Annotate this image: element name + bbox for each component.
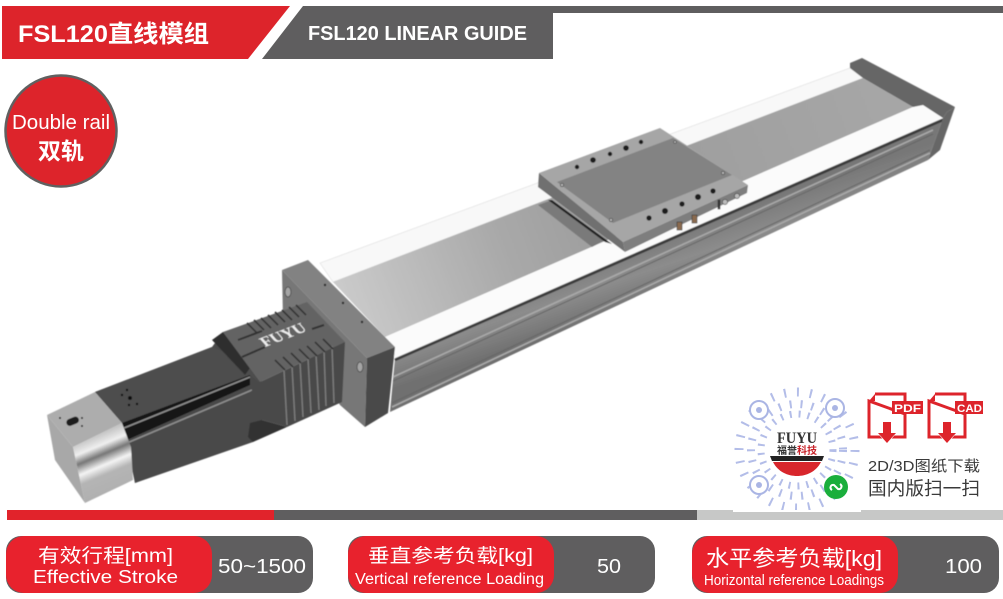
download icon: PDF (869, 394, 923, 443)
logo bowl (770, 456, 824, 476)
far end plate (850, 58, 955, 160)
QR code panel (733, 385, 861, 512)
motor body (95, 332, 262, 483)
rail side profile (390, 118, 943, 412)
download icon: CAD: CAD (957, 403, 982, 415)
carriage screws (560, 141, 725, 222)
stroke Chinese label: 有效行程[mm] (38, 545, 173, 567)
download caption: 2D/3D图纸下载 (868, 458, 980, 475)
carriage holes (575, 140, 716, 221)
spec: vertical load (348, 536, 655, 593)
vertical load value: 50 (597, 556, 621, 578)
carriage dark edge (548, 200, 612, 244)
QR radial dashes (739, 392, 855, 508)
linear module product illustration (47, 58, 955, 503)
carriage slide plate (538, 128, 748, 252)
spec: effective stroke (6, 536, 313, 593)
vertical load English label: Vertical reference Loading (355, 571, 544, 588)
FUYU logo on housing: FUYU (256, 320, 311, 350)
vertical load Chinese label: 垂直参考负载[kg] (368, 545, 533, 567)
English heading: FSL120 LINEAR GUIDE (308, 23, 527, 45)
Fuyu Technology Chinese logo: 福誉科技 (777, 444, 817, 457)
horizontal load Chinese label: 水平参考负载[kg] (706, 546, 882, 571)
badge English text: Double rail (12, 112, 110, 134)
motor top holes (121, 389, 138, 406)
carriage shadow (538, 200, 605, 247)
badge Chinese text: 双轨 (38, 138, 84, 164)
motor-side end plate (282, 260, 395, 427)
horizontal load value: 100 (945, 556, 982, 578)
horizontal load English label: Horizontal reference Loadings (704, 572, 884, 589)
stroke English label: Effective Stroke (33, 567, 178, 587)
badge: double rail (6, 76, 116, 186)
download icon: PDF: PDF (894, 403, 921, 415)
tri-colour divider (7, 510, 1003, 520)
header: grey English banner (262, 6, 1003, 59)
motor aluminium end cap (47, 392, 133, 503)
title: FSL120直线模组 (18, 21, 209, 48)
spec: horizontal load (692, 536, 999, 593)
plate mounting holes (285, 287, 291, 297)
FUYU logo: FUYU (777, 430, 817, 447)
rail top: centre grey band (333, 78, 913, 337)
download icon: CAD (929, 394, 983, 443)
mini-program green badge (824, 475, 848, 499)
carriage fittings (677, 193, 740, 230)
top fins (247, 305, 333, 370)
stroke value: 50~1500 (218, 556, 306, 578)
rail top: front white strip (385, 105, 943, 358)
QR finder rings (750, 399, 844, 494)
rail top: rear white strip (320, 68, 863, 282)
side fins (284, 346, 334, 425)
header: red title banner (2, 6, 290, 59)
scan caption: 国内版扫一扫 (868, 478, 980, 499)
gearbox housing (212, 302, 345, 442)
QR logo background (768, 423, 826, 481)
